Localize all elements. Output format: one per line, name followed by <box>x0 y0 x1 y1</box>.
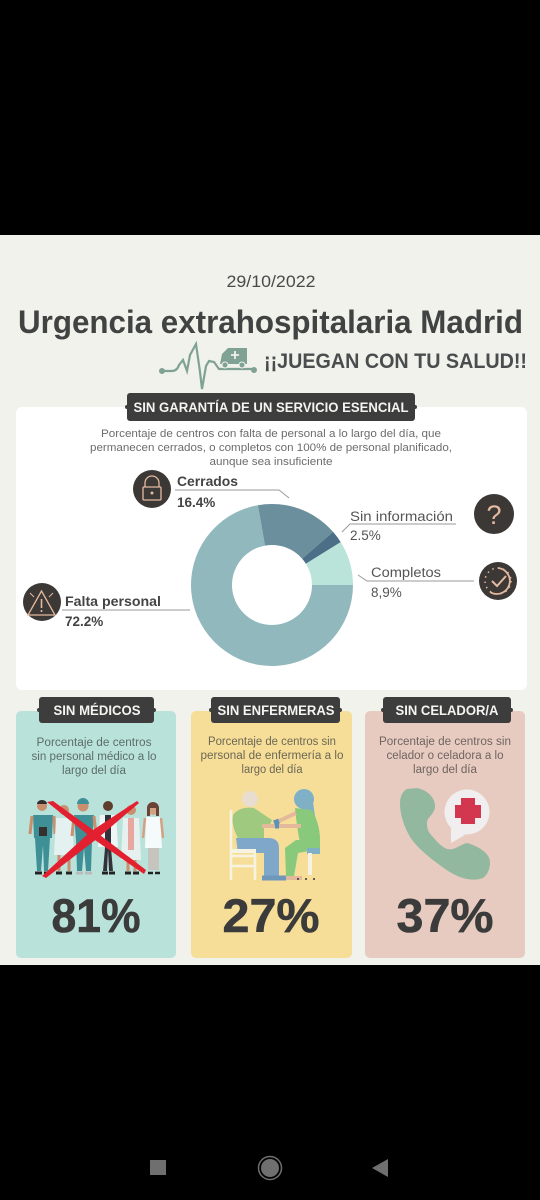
label: falta personal: Falta personal <box>65 594 161 609</box>
icon: medical staff crossed out <box>30 798 163 878</box>
doctor 1 <box>30 800 55 873</box>
donut chart <box>191 504 353 666</box>
label: cerrados <box>175 474 289 510</box>
icon: check <box>479 562 517 600</box>
label: sin información: 2.5% <box>350 528 381 543</box>
heading: sin enfermeras: SIN ENFERMERAS <box>218 703 334 718</box>
icon: heartbeat line with ambulance <box>159 344 257 389</box>
label: completos: 8,9% <box>371 585 402 600</box>
heading: sin médicos <box>37 697 156 723</box>
title: Urgencia extrahospitalaria Madrid <box>18 304 523 340</box>
icon: question mark <box>474 494 514 534</box>
panel: sin enfermeras <box>191 697 352 958</box>
description text <box>90 428 452 468</box>
heading: sin enfermeras <box>209 697 342 723</box>
icon: question mark: ? <box>486 500 502 530</box>
description text: largo del día <box>62 765 127 777</box>
panel: sin garantía <box>16 393 527 690</box>
heading: sin garantía <box>125 393 417 421</box>
label: sin información <box>342 509 456 543</box>
label: falta personal <box>62 594 190 629</box>
description text <box>200 736 344 776</box>
doctor 5 <box>121 805 141 873</box>
nurse <box>143 802 163 873</box>
label: falta personal: 72.2% <box>65 614 103 629</box>
label: cerrados: Cerrados <box>177 474 238 489</box>
label: cerrados: 16.4% <box>177 495 215 510</box>
icon: phone with medical speech bubble <box>400 788 490 880</box>
nurse <box>274 789 320 879</box>
page background panel <box>0 235 540 965</box>
doctor 2 <box>54 805 74 873</box>
red cross-out <box>42 801 146 878</box>
value: 81%: 81% <box>52 889 140 942</box>
description text: celador o celadora a lo <box>386 750 504 762</box>
doctor 4 <box>98 801 118 873</box>
phone navigation bar <box>150 1156 388 1180</box>
chair <box>231 810 256 880</box>
label: completos <box>358 565 474 600</box>
description text: sin personal médico a lo <box>32 751 156 763</box>
label: completos: Completos <box>371 565 441 580</box>
panel: sin médicos <box>16 697 176 958</box>
panel: sin celador/a <box>365 697 525 958</box>
label: sin información: Sin información <box>350 509 453 524</box>
description text <box>379 736 511 776</box>
value: 37%: 37% <box>396 889 494 942</box>
description text <box>32 737 156 777</box>
description text: Porcentaje de centros sin <box>379 736 511 748</box>
heading: sin médicos: SIN MÉDICOS <box>54 703 140 718</box>
subtitle: ¡¡JUEGAN CON TU SALUD!! <box>264 350 527 373</box>
heading: sin celador/a: SIN CELADOR/A <box>396 703 499 718</box>
description text: permanecen cerrados, o completos con 100% de personal planificado, <box>90 442 452 454</box>
description text: aunque sea insuficiente <box>210 456 332 468</box>
heading: sin celador/a <box>381 697 513 723</box>
doctor 3 <box>72 798 96 873</box>
value: 27%: 27% <box>222 889 320 942</box>
icon: lock <box>133 470 171 508</box>
heading: sin garantía: SIN GARANTÍA DE UN SERVICIO ESENCIAL <box>134 400 408 415</box>
icon: warning <box>23 583 61 621</box>
description text: Porcentaje de centros <box>36 737 152 749</box>
description text: largo del día <box>413 764 478 776</box>
patient <box>231 791 286 878</box>
date: 29/10/2022 <box>226 273 316 291</box>
description text: Porcentaje de centros sin <box>208 736 336 748</box>
description text: largo del día <box>242 764 303 776</box>
description text: Porcentaje de centros con falta de personal a lo largo del día, que <box>101 428 441 440</box>
icon: nurse attending patient <box>231 789 320 880</box>
description text: personal de enfermería a lo <box>200 750 344 762</box>
